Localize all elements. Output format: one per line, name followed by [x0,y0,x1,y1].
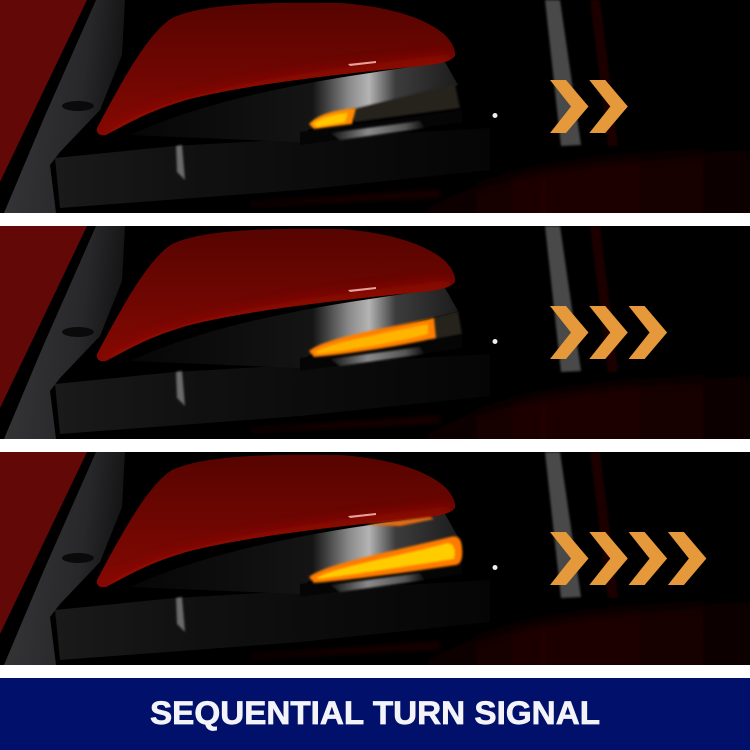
lit signal segment [309,108,356,129]
title banner [0,678,750,750]
orange reflection under mirror shell [365,517,434,526]
lit signal segment [309,318,436,357]
lit signal segment [309,536,462,583]
arrows: two chevrons [550,80,628,133]
arrows: four chevrons [550,532,706,585]
unlit signal lens [350,84,460,122]
arrows: three chevrons [550,306,667,359]
panel: third frame, signal fully lit [0,452,750,677]
panel: second frame, signal half lit [0,226,750,451]
unlit signal lens tip [430,311,462,340]
panel: first frame, signal just starting [0,0,750,225]
title: SEQUENTIAL TURN SIGNAL [150,695,600,731]
